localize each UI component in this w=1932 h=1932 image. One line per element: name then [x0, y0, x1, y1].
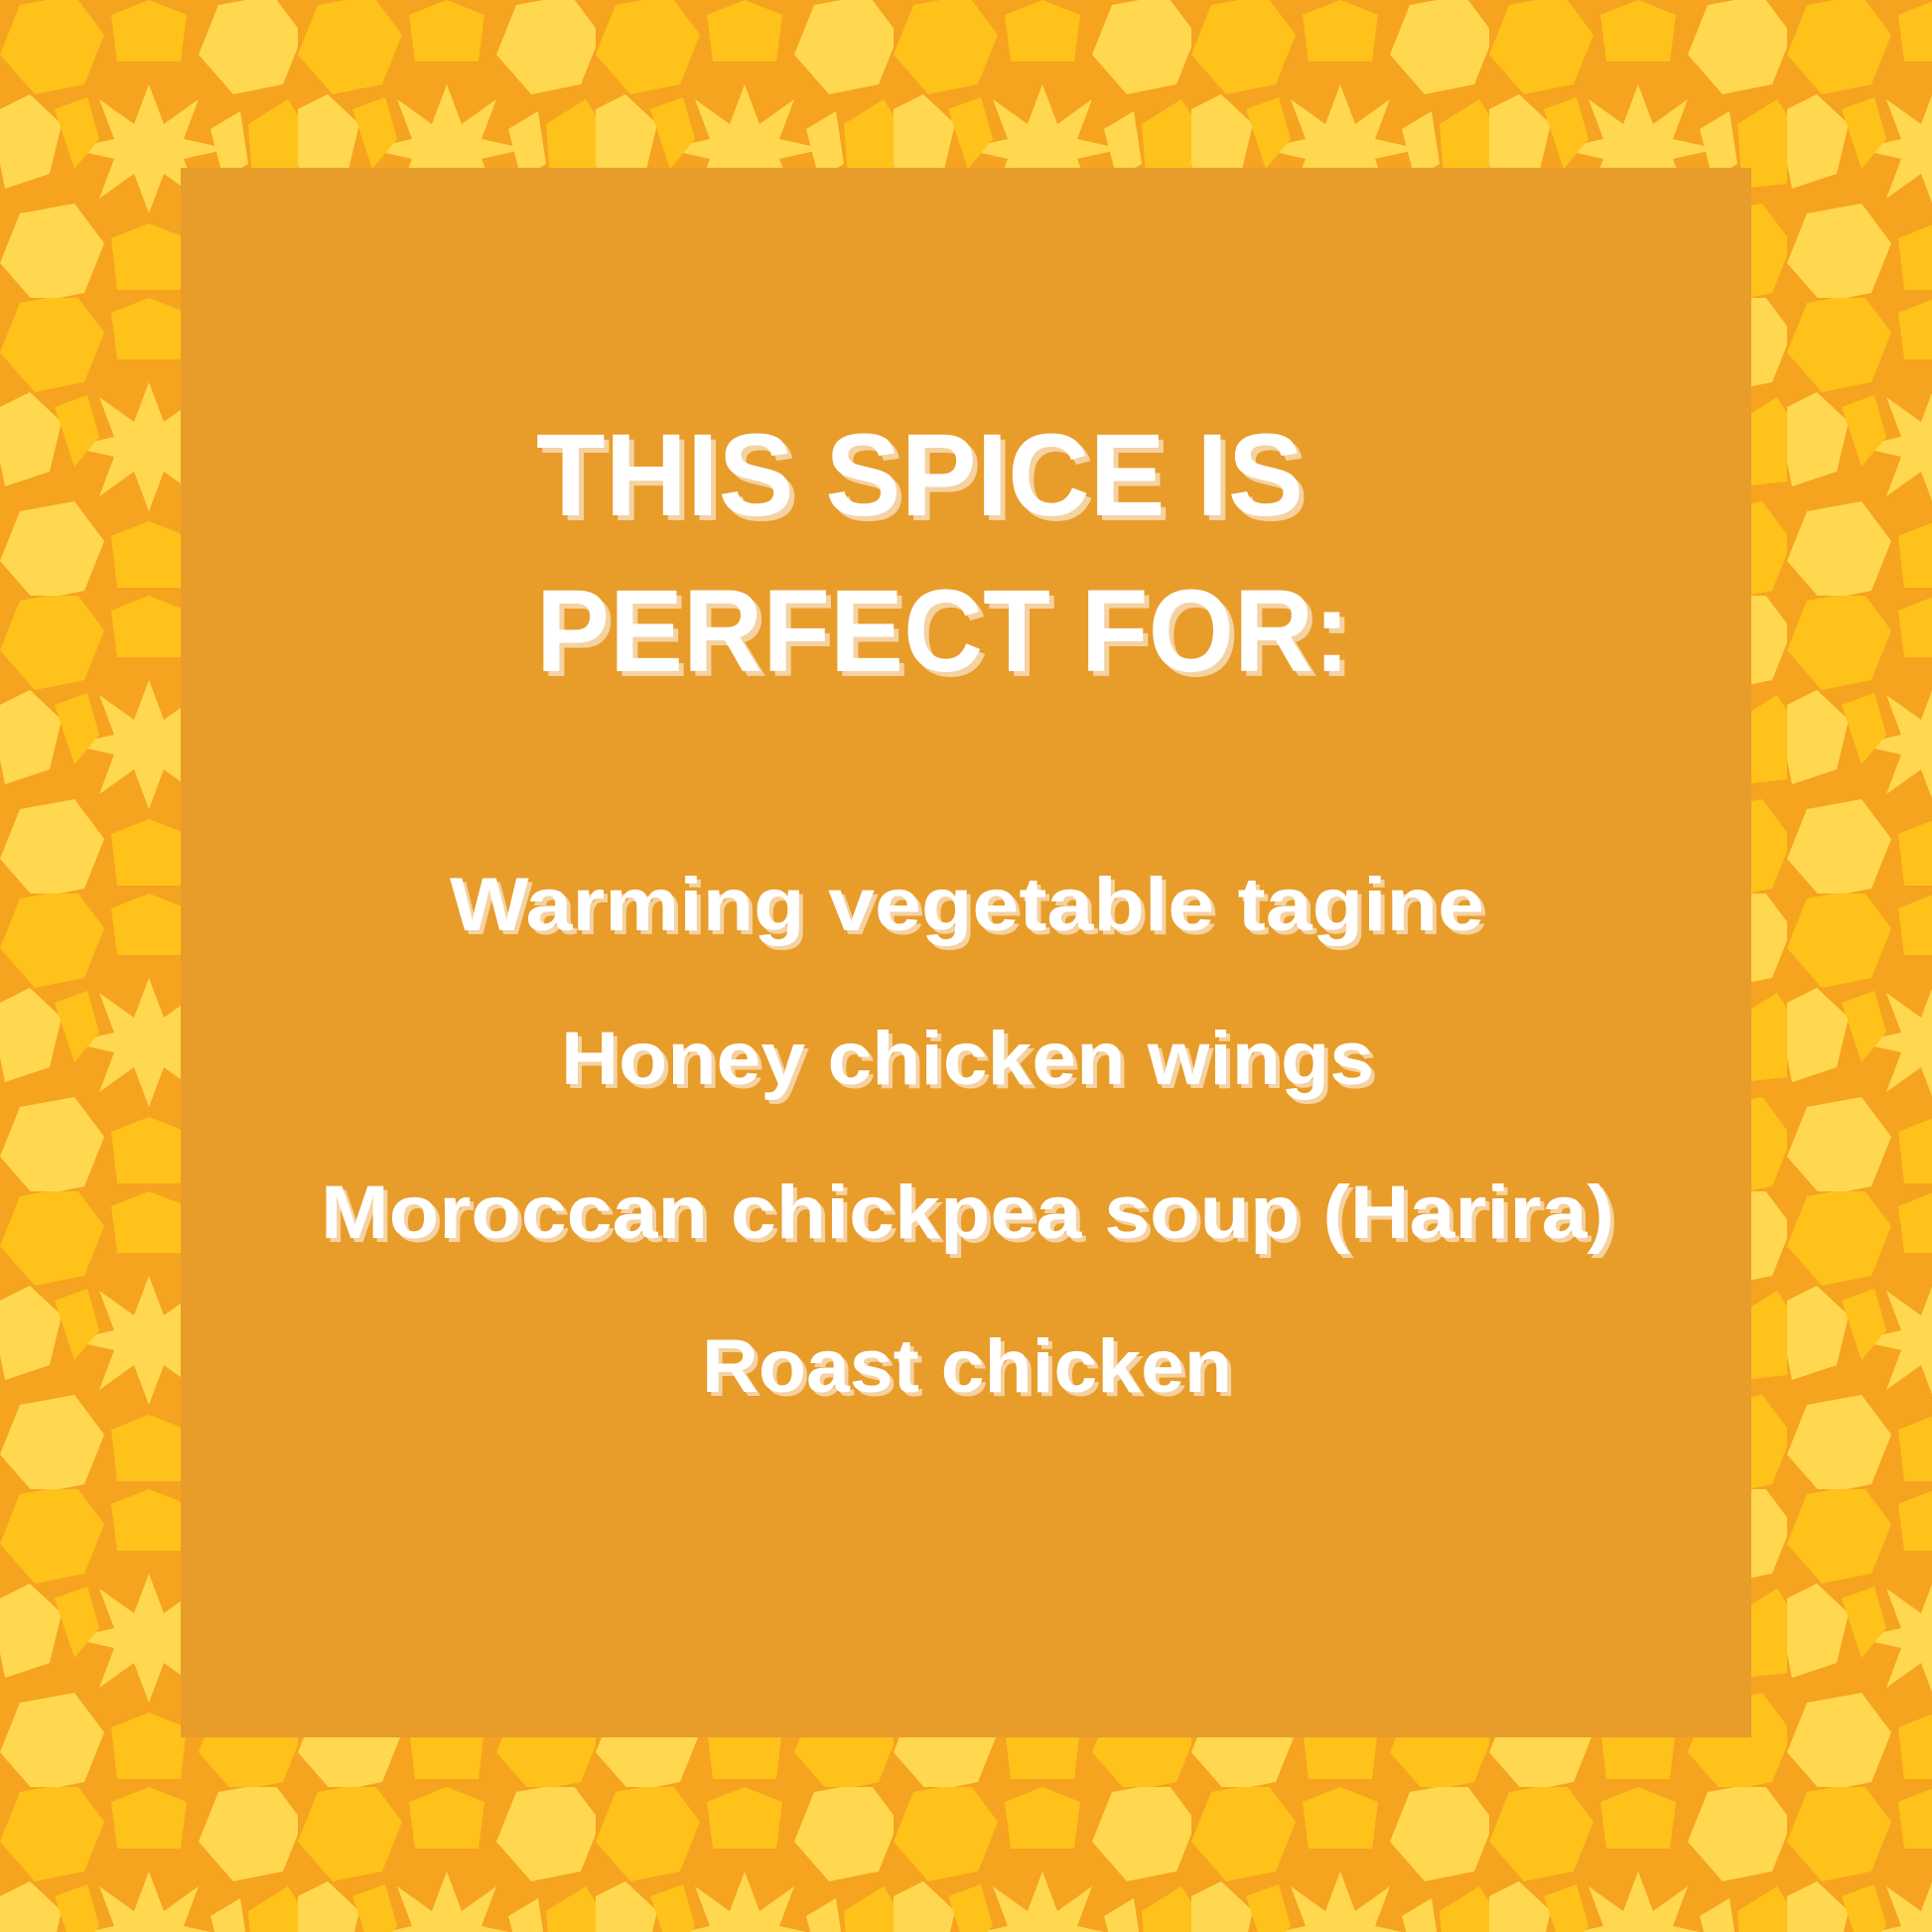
heading: THIS SPICE IS — [541, 415, 1309, 546]
heading — [536, 410, 1355, 702]
central panel — [181, 168, 1751, 1737]
heading: PERFECT FOR: — [541, 571, 1355, 702]
item: tagine: Warming vegetable tagine — [450, 863, 1484, 947]
item: harira: Moroccan chickpea soup (Harira) — [321, 1171, 1614, 1255]
list of dishes — [321, 863, 1618, 1413]
item: tagine: Warming vegetable tagine — [454, 867, 1488, 951]
item: wings: Honey chicken wings — [565, 1021, 1378, 1105]
item: roast chicken: Roast chicken — [702, 1324, 1232, 1409]
heading: PERFECT FOR: — [536, 566, 1350, 697]
item: roast chicken: Roast chicken — [706, 1328, 1236, 1413]
item: harira: Moroccan chickpea soup (Harira) — [325, 1174, 1618, 1259]
heading: THIS SPICE IS — [536, 410, 1304, 541]
item: wings: Honey chicken wings — [561, 1017, 1374, 1101]
